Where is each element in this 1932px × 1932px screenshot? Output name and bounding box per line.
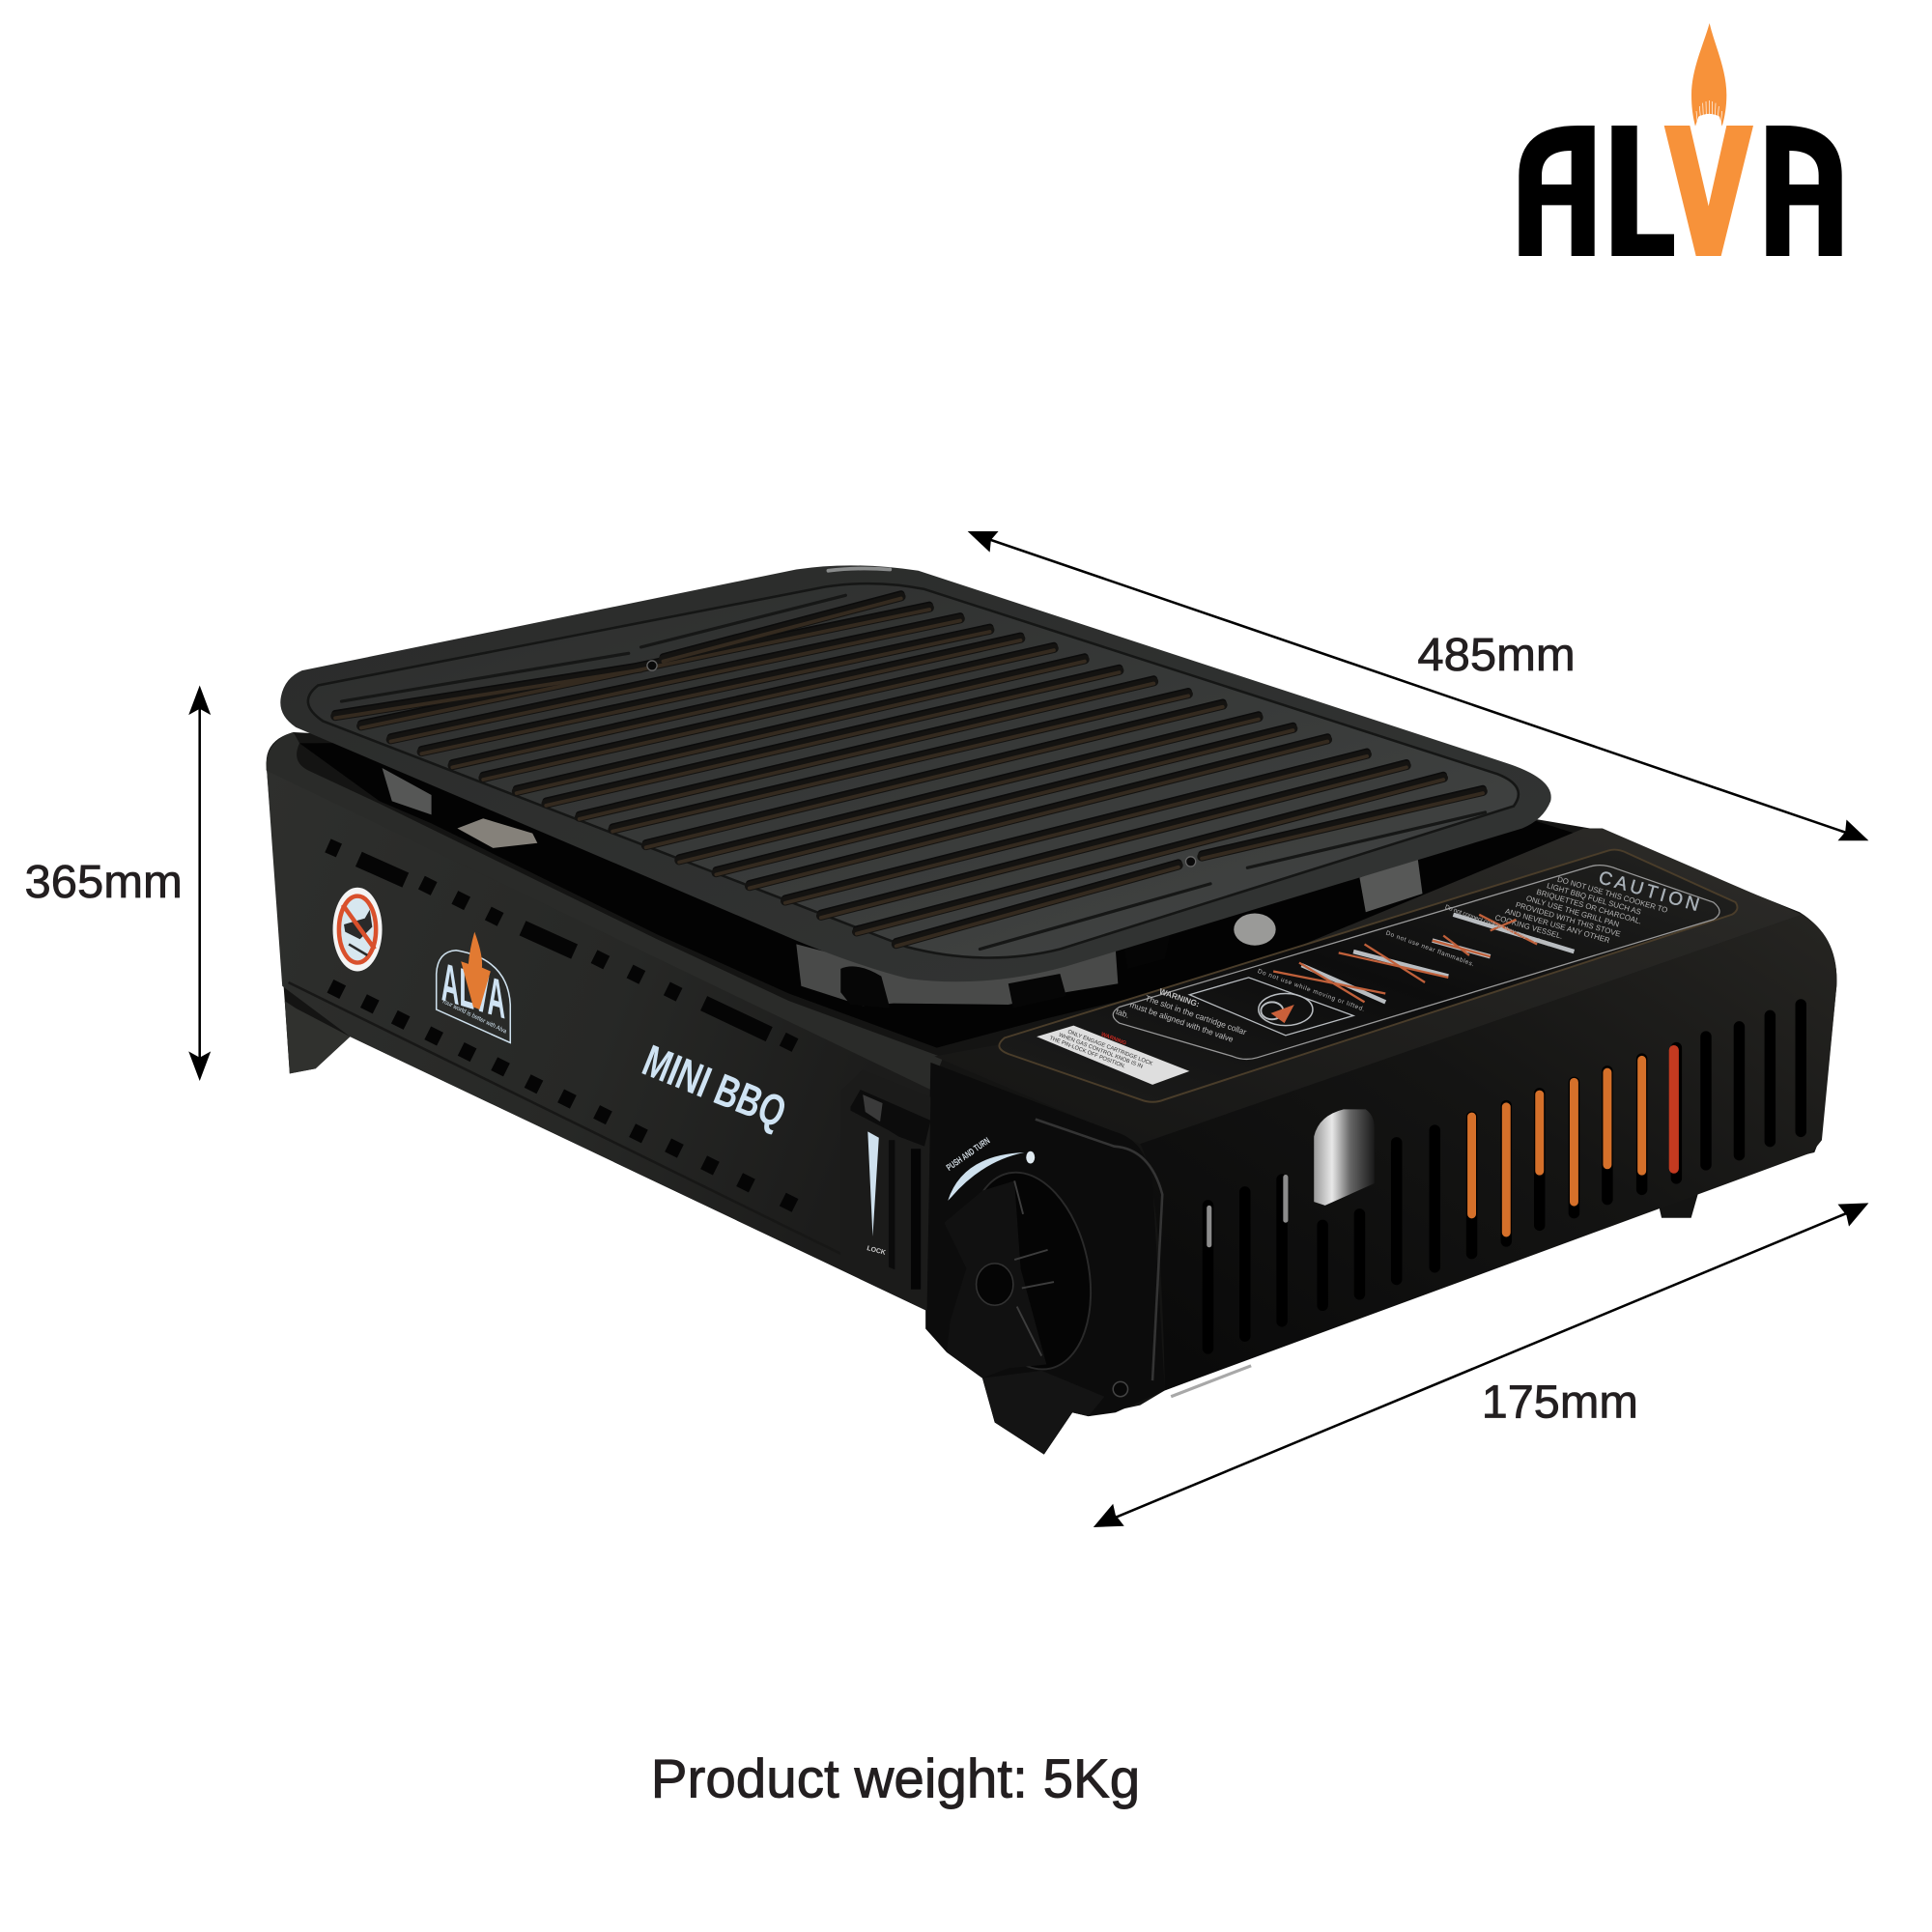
sign inner — [339, 896, 376, 963]
hand mark — [344, 910, 372, 939]
rib grooves — [335, 597, 1483, 944]
burner supports centre — [796, 944, 1118, 1006]
knob hub — [977, 1264, 1013, 1305]
sign body — [333, 888, 383, 971]
thin rim grooves — [341, 595, 1486, 950]
burner support left — [383, 768, 432, 814]
logo letter V — [1664, 126, 1753, 256]
orange cartridge behind slots — [1472, 1060, 1642, 1233]
caution text: BRIQUETTES OR CHARCOAL. — [1535, 888, 1642, 926]
rib oil texture — [335, 598, 1483, 946]
knob grip — [944, 1180, 1046, 1378]
burner pocket right — [1009, 974, 1066, 1009]
product: mini BBQ stove — [267, 565, 1836, 1455]
logo second letter A — [1766, 126, 1842, 256]
warning label text: WHEN GAS CONTROL KNOB IS IN — [1058, 1033, 1144, 1070]
product weight: Product weight: 5Kg — [651, 1747, 1140, 1808]
length arrow head right — [1838, 820, 1868, 840]
bolt front — [1186, 857, 1196, 867]
burner pocket left — [840, 966, 890, 1009]
warning text: tab. — [1115, 1007, 1130, 1020]
knob spokes — [1014, 1180, 1054, 1356]
grill plate — [280, 565, 1551, 981]
left side panel — [267, 763, 930, 1310]
side panel vent holes — [327, 845, 795, 1206]
front edge sliver — [1171, 1366, 1251, 1397]
bolt rear — [647, 661, 657, 670]
warning label heading: WARNING — [1100, 1032, 1127, 1047]
caption three: Do not connect cookers they may explode. — [1444, 904, 1550, 949]
lever recess — [840, 1070, 930, 1310]
cigarette mark — [349, 944, 367, 955]
no smoking icon — [333, 888, 383, 971]
bezel screw — [1113, 1381, 1128, 1397]
silver window — [1314, 1109, 1375, 1206]
flame fringe — [1696, 100, 1722, 124]
caution text: DO NOT USE THIS COOKER TO — [1556, 875, 1668, 915]
caution text: PROVIDED WITH THIS STOVE — [1515, 900, 1622, 939]
stove silhouette — [267, 732, 1836, 1455]
warning label text: ONLY ENGAGE CARTRIDGE LOCK — [1066, 1030, 1153, 1067]
lock lever — [850, 1090, 930, 1290]
sticker plate — [999, 850, 1737, 1102]
height label: 365mm — [25, 856, 183, 908]
side panel long slots — [358, 859, 769, 1035]
warning label — [1037, 1024, 1189, 1085]
control knob — [944, 1161, 1108, 1380]
logo letter L — [1611, 126, 1674, 256]
badge flame and V — [461, 932, 491, 1009]
diagram captions — [1257, 904, 1550, 1013]
plate well — [308, 583, 1519, 957]
logo letter A — [1519, 126, 1595, 256]
caution text: ONLY USE THE GRILL PAN — [1525, 894, 1620, 929]
warning label text: THE PIN-LOCK OFF POSITION. — [1048, 1036, 1126, 1070]
length dimension — [968, 531, 1868, 840]
dial arc — [948, 1152, 1024, 1201]
plate body — [280, 565, 1551, 981]
caution text: COOKING VESSEL. — [1494, 913, 1564, 941]
warning pointer — [1271, 1005, 1294, 1023]
burner pocket rear — [1124, 930, 1171, 969]
caption one: Do not use while moving or lifted. — [1257, 968, 1366, 1013]
caution heading: CAUTION — [1596, 867, 1701, 916]
top rim highlight — [828, 568, 890, 571]
rib shadows — [335, 594, 1483, 942]
side panel logo — [437, 932, 510, 1042]
width dimension — [1094, 1203, 1868, 1527]
width arrow head left — [1094, 1504, 1124, 1527]
lever dark strip — [889, 1140, 895, 1269]
front bezel — [925, 1063, 1165, 1416]
mini bbq label: MINI BBQ — [636, 1035, 793, 1137]
badge tagline: Your world is better with Alva — [440, 998, 508, 1036]
width arrow head right — [1838, 1203, 1868, 1227]
vent slots — [1208, 1005, 1801, 1349]
left panel top rim — [267, 732, 943, 1090]
height arrow bottom — [188, 1051, 211, 1081]
length label: 485mm — [1417, 629, 1576, 681]
silver slot glints — [1209, 1178, 1286, 1245]
badge outline — [437, 951, 510, 1042]
warning text: The slot in the cartridge collar — [1144, 993, 1248, 1037]
warning text: WARNING: — [1158, 986, 1201, 1009]
front foot — [982, 1371, 1104, 1455]
red cartridge label — [1670, 1050, 1678, 1169]
length arrow line — [980, 536, 1855, 836]
warning text: must be aligned with the valve — [1128, 1000, 1235, 1044]
lock text: LOCK — [867, 1245, 886, 1257]
lever indicator — [867, 1131, 879, 1236]
cavity under grill plate — [299, 740, 1590, 1048]
width arrow line — [1107, 1209, 1857, 1521]
prohibition slash — [343, 905, 375, 950]
lever slot — [911, 1149, 921, 1290]
caution text: LIGHT BBQ FUEL SUCH AS — [1546, 881, 1642, 917]
dial dot — [1026, 1151, 1035, 1164]
burner valve — [457, 818, 537, 848]
top deck — [934, 828, 1803, 1144]
warning label card — [1037, 1026, 1189, 1085]
lever highlight — [863, 1094, 883, 1122]
lever cap — [850, 1090, 930, 1147]
crossed out marks — [1273, 915, 1537, 1002]
burner support right — [1359, 857, 1423, 912]
rear left foot — [285, 1001, 350, 1073]
product: mini BBQ stove: ALVA — [441, 952, 505, 1031]
caption two: Do not use near flammables. — [1385, 930, 1475, 968]
height arrow top — [188, 685, 211, 715]
push and turn label: PUSH AND TURN — [945, 1136, 992, 1174]
knurled adjuster — [1234, 914, 1276, 946]
warning instruction diagrams — [1189, 915, 1574, 1036]
caution outline — [1113, 866, 1719, 1059]
length arrow head left — [968, 531, 999, 553]
logo flame — [1691, 23, 1726, 127]
right side face — [1140, 915, 1836, 1390]
panel lower band — [289, 982, 919, 1292]
caution text: AND NEVER USE ANY OTHER — [1504, 907, 1611, 945]
width label: 175mm — [1482, 1376, 1638, 1428]
bezel gloss — [1036, 1120, 1162, 1380]
height dimension — [25, 685, 211, 1081]
logo: ALVA — [1519, 23, 1842, 256]
height arrow line — [199, 697, 201, 1070]
knob disc — [951, 1161, 1108, 1380]
